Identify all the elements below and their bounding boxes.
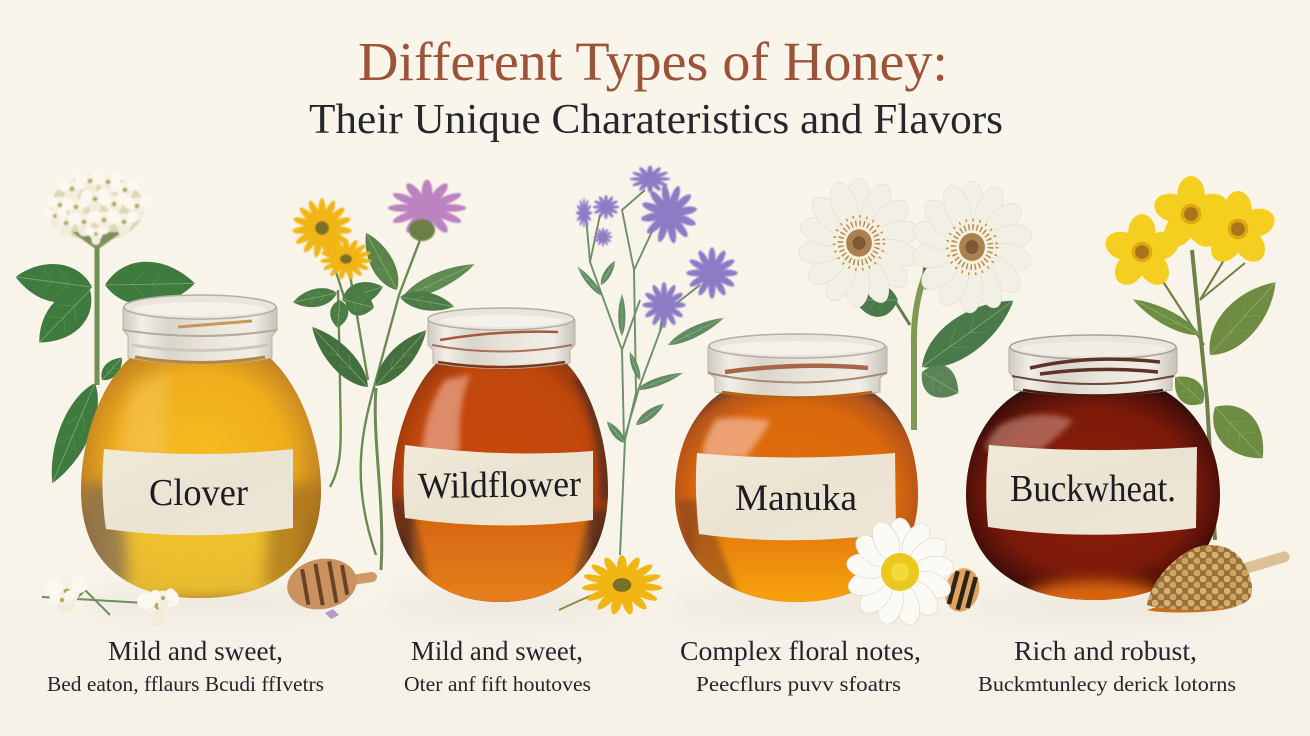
jar label: [102, 449, 293, 535]
honey dipper: clover: [283, 553, 372, 619]
label text: Wildflower: [418, 464, 581, 507]
jar label: [696, 453, 896, 540]
lavender stems: [585, 190, 700, 555]
jar neck: [1009, 335, 1177, 396]
clover flower head: [43, 170, 151, 250]
description: wildflower: Oter anf fift houtoves: [404, 672, 591, 696]
buckwheat stems: [1162, 250, 1245, 540]
description: clover: [47, 636, 324, 696]
plant: white clover: [13, 170, 195, 490]
description: clover: Bed eaton, fflaurs Bcudi ffIvetrs: [47, 672, 324, 696]
description: buckwheat: Rich and robust,: [1014, 636, 1197, 666]
jar neck: [123, 295, 277, 364]
jar: clover: [81, 295, 325, 600]
jar label: [986, 445, 1197, 535]
yellow blooms: [292, 198, 372, 280]
description: buckwheat: Buckmtunlecy derick lotorns: [978, 672, 1236, 696]
clover leaves: [13, 259, 195, 490]
title: Their Unique Charateristics and Flavors: [309, 97, 1003, 143]
jar neck: [428, 308, 575, 368]
manuka stems: [893, 240, 945, 430]
title: Different Types of Honey:: [358, 31, 948, 92]
wildflower stems: [329, 240, 420, 570]
wildflower leaves: [291, 228, 478, 395]
plant: lavender sprigs: [575, 166, 738, 555]
white daisy: [845, 518, 955, 627]
title: [309, 31, 1003, 143]
honey dipper: manuka: [940, 564, 984, 616]
small white clover sprig: [42, 576, 179, 627]
label text: Buckwheat.: [1010, 468, 1176, 510]
description: wildflower: Mild and sweet,: [411, 636, 583, 666]
description: manuka: [680, 636, 921, 696]
honey body: [81, 358, 321, 598]
plant: wildflowers: [291, 180, 478, 570]
buckwheat blossoms: [1102, 214, 1182, 291]
fallen yellow flower: [559, 555, 663, 615]
honey body: [392, 362, 608, 602]
description: wildflower: [404, 636, 591, 696]
description: manuka: Complex floral notes,: [680, 636, 921, 666]
jar: wildflower: [392, 308, 612, 605]
purple clover bloom: [388, 180, 466, 241]
description: manuka: Peecflurs puvv sfoatrs: [696, 672, 901, 696]
lavender leaves: [575, 259, 726, 446]
plant: manuka: [797, 178, 1034, 430]
manuka blossoms: [797, 178, 921, 308]
manuka leaves: [854, 196, 1024, 406]
description: buckwheat: [978, 636, 1236, 696]
jar: buckwheat: [966, 335, 1220, 620]
lavender blooms: [576, 166, 738, 328]
label text: Clover: [149, 472, 248, 514]
buckwheat leaves: [1129, 270, 1288, 471]
honey body: [675, 392, 918, 602]
honey body: [966, 390, 1220, 600]
jar: manuka: [675, 334, 918, 610]
plant: buckwheat: [1102, 176, 1288, 540]
description: clover: Mild and sweet,: [108, 636, 283, 666]
jar neck: [708, 334, 887, 398]
floor shadows: [80, 593, 1235, 615]
label text: Manuka: [735, 478, 857, 519]
honeycomb on wooden dipper: [1147, 545, 1284, 612]
jar label: [404, 445, 593, 526]
